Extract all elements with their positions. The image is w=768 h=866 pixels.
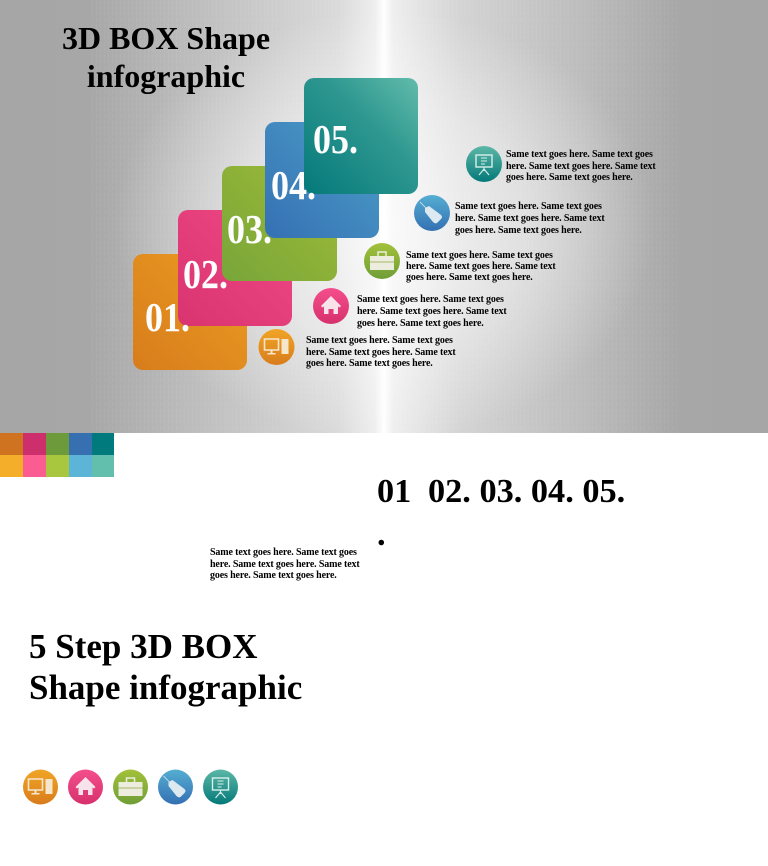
text block 1 bbox=[306, 335, 456, 369]
text block 1: Same text goes here. Same text goes bbox=[306, 335, 453, 346]
box 03 bbox=[222, 166, 337, 281]
box 01 bbox=[133, 254, 247, 370]
text block 2 bbox=[357, 294, 507, 329]
box 02 bbox=[178, 210, 292, 326]
title: infographic bbox=[87, 58, 245, 94]
background panel bbox=[0, 0, 768, 433]
heading: 5 step: 5 Step 3D BOX bbox=[29, 627, 258, 666]
text block 4: Same text goes here. Same text goes bbox=[455, 201, 602, 212]
text block 5: goes here. Same text goes here. bbox=[506, 172, 633, 183]
icon: computer bbox=[23, 770, 58, 804]
text block 4: goes here. Same text goes here. bbox=[455, 225, 582, 236]
text block 4: here. Same text goes here. Same text bbox=[455, 213, 605, 224]
title bbox=[62, 20, 270, 94]
number 03: 03. bbox=[227, 206, 272, 252]
text block 2: goes here. Same text goes here. bbox=[357, 318, 484, 329]
icon: computer bbox=[258, 329, 294, 365]
text block 1: goes here. Same text goes here. bbox=[306, 358, 433, 369]
number 01: 01. bbox=[145, 294, 190, 340]
box 05 bbox=[304, 78, 418, 194]
number row bbox=[377, 472, 625, 553]
text block 1: here. Same text goes here. Same text bbox=[306, 347, 456, 358]
text block 3: goes here. Same text goes here. bbox=[406, 272, 533, 283]
text block 5: here. Same text goes here. Same text bbox=[506, 161, 656, 172]
sample text block: here. Same text goes here. Same text bbox=[210, 559, 360, 570]
title: 3D BOX Shape bbox=[62, 20, 270, 56]
icon: home bbox=[68, 770, 103, 804]
text block 2: here. Same text goes here. Same text bbox=[357, 306, 507, 317]
text block 3 bbox=[406, 250, 556, 283]
icon: presentation board bbox=[466, 146, 502, 182]
number row: . bbox=[377, 515, 386, 553]
sample text block bbox=[210, 547, 360, 581]
icon: tag bbox=[158, 770, 193, 804]
icon: presentation board bbox=[203, 770, 238, 804]
icon: briefcase bbox=[364, 243, 400, 279]
text block 3: here. Same text goes here. Same text bbox=[406, 261, 556, 272]
icon: tag bbox=[414, 195, 450, 231]
panel: stacked boxes bbox=[133, 78, 418, 370]
colour palette swatches bbox=[0, 433, 114, 477]
text block 3: Same text goes here. Same text goes bbox=[406, 250, 553, 261]
icon: home bbox=[313, 288, 349, 324]
text block 5 bbox=[506, 149, 656, 183]
heading: 5 step: Shape infographic bbox=[29, 668, 302, 707]
text block 5: Same text goes here. Same text goes bbox=[506, 149, 653, 160]
icon: briefcase bbox=[113, 770, 148, 804]
text block 4 bbox=[455, 201, 605, 236]
number row: 01 bbox=[377, 472, 411, 510]
text block 2: Same text goes here. Same text goes bbox=[357, 294, 504, 305]
sample text block: Same text goes here. Same text goes bbox=[210, 547, 357, 558]
heading: 5 step bbox=[29, 627, 302, 707]
number 04: 04. bbox=[271, 162, 316, 208]
icon row bbox=[23, 770, 238, 804]
sample text block: goes here. Same text goes here. bbox=[210, 570, 337, 581]
number 05: 05. bbox=[313, 116, 358, 162]
box 04 bbox=[265, 122, 379, 238]
number 02: 02. bbox=[183, 251, 228, 297]
number row: 02. 03. 04. 05. bbox=[428, 472, 625, 510]
